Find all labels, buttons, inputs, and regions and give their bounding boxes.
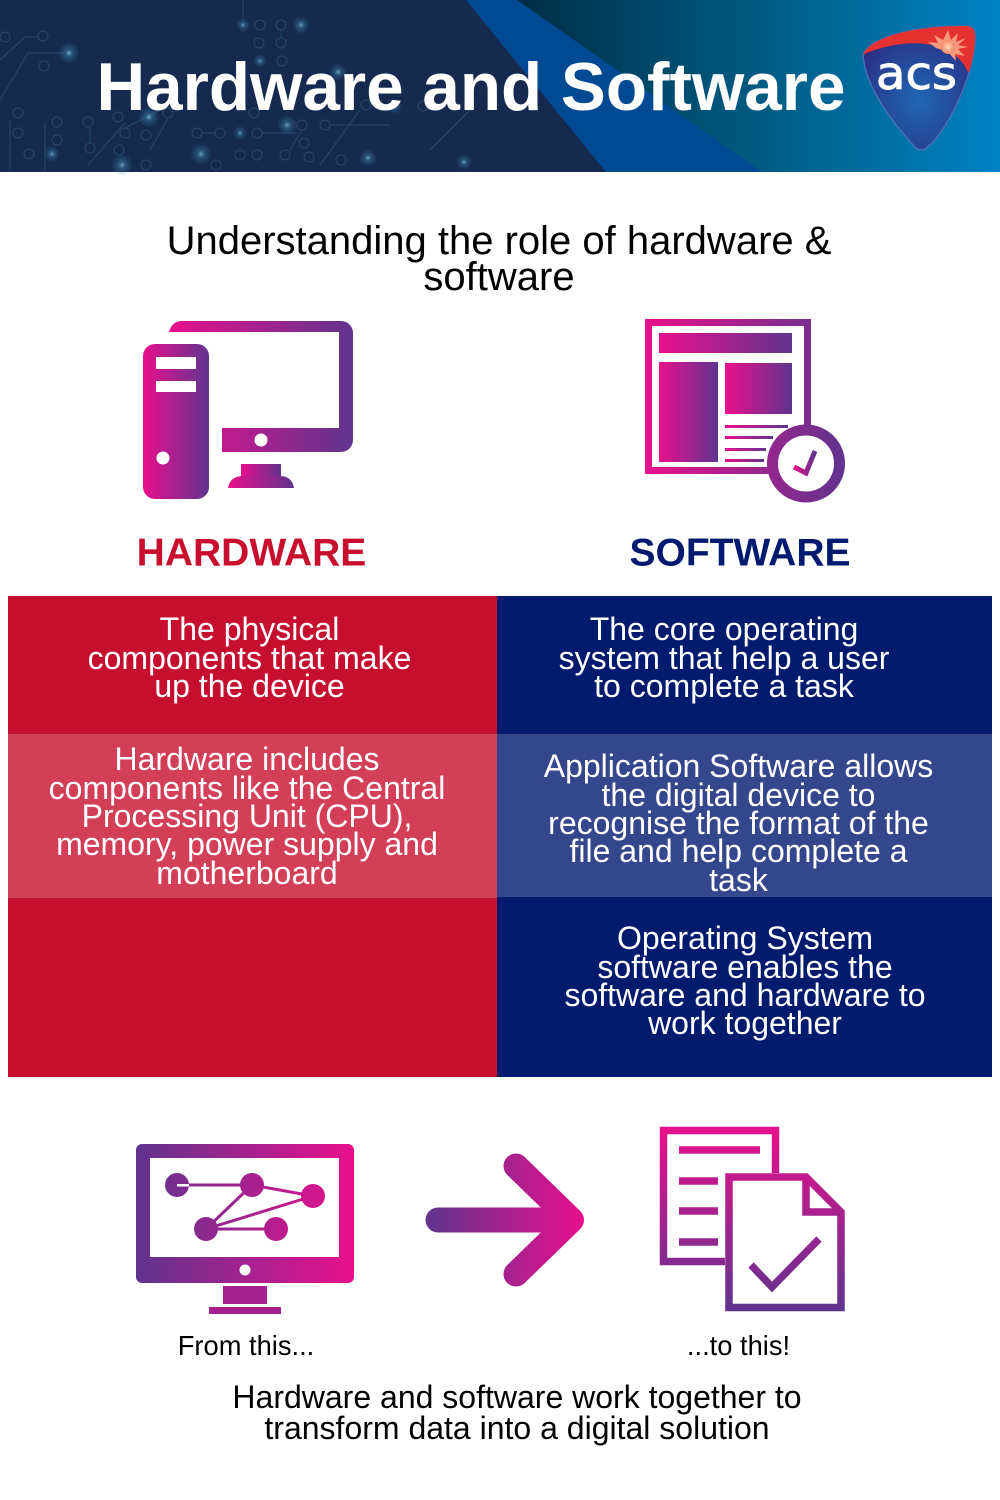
- software row one: [497, 596, 992, 734]
- circuit pattern: [0, 0, 470, 170]
- text line four: [725, 459, 764, 462]
- software row three: software and hardware to: [564, 977, 926, 1013]
- check mark: [794, 451, 815, 473]
- network links: [177, 1185, 313, 1229]
- page fold: [806, 1177, 841, 1212]
- panel: software column: [497, 596, 992, 1077]
- window frame: [648, 322, 808, 470]
- hardware row two: memory, power supply and: [56, 826, 438, 862]
- banner teal section: [517, 0, 1000, 172]
- hardware row one: [8, 596, 497, 734]
- subtitle: [167, 219, 832, 299]
- title: Hardware and Software: [96, 50, 846, 125]
- heading: hardware: HARDWARE: [137, 532, 366, 574]
- ACS logo: [860, 20, 980, 150]
- monitor neck: [241, 464, 281, 477]
- heading: software: SOFTWARE: [630, 532, 850, 574]
- back document: [664, 1130, 776, 1262]
- software row one: The core operating: [590, 611, 858, 647]
- monitor button: [240, 1264, 250, 1276]
- text line two: [725, 436, 773, 439]
- hardware row one: The physical: [160, 611, 339, 647]
- software row two: Application Software allows: [544, 748, 933, 784]
- clock circle: [772, 430, 840, 497]
- icon: documents with check: [664, 1130, 841, 1308]
- shield body: [863, 26, 975, 150]
- monitor: [169, 321, 353, 452]
- sunburst: [928, 30, 968, 61]
- closing statement: Hardware and software work together to: [232, 1379, 802, 1415]
- software row three: software enables the: [597, 949, 893, 985]
- monitor frame: [136, 1144, 354, 1283]
- header bar: [659, 333, 792, 353]
- arrow: [438, 1166, 572, 1274]
- front document: [729, 1177, 841, 1308]
- check mark: [751, 1239, 819, 1287]
- hardware row one: components that make: [88, 640, 411, 676]
- banner background: [0, 0, 1000, 172]
- hardware row two: Hardware includes: [114, 741, 380, 777]
- header banner: [0, 0, 1000, 176]
- hardware row one: up the device: [154, 668, 345, 704]
- subtitle: Understanding the role of hardware &: [167, 219, 832, 263]
- network nodes: [165, 1173, 325, 1241]
- left block: [659, 362, 718, 462]
- hardware row two: components like the Central: [49, 770, 445, 806]
- software row two: [497, 734, 992, 898]
- caption: to this: ...to this!: [687, 1330, 790, 1361]
- software row three: Operating System: [617, 920, 873, 956]
- glowing circuit nodes: [44, 16, 472, 176]
- tower: [143, 344, 209, 499]
- software row three: [497, 897, 992, 1077]
- caption: from this: From this...: [178, 1330, 314, 1361]
- node highlight: [177, 1184, 189, 1186]
- software row two: the digital device to: [602, 777, 875, 813]
- software row one: system that help a user: [559, 640, 890, 676]
- text line one: [725, 425, 788, 428]
- software row two: task: [709, 862, 769, 898]
- right block: [725, 363, 792, 414]
- document lines: [679, 1150, 760, 1242]
- monitor button: [254, 434, 268, 446]
- monitor base: [228, 476, 294, 488]
- hardware row three: [8, 898, 497, 1077]
- hardware row two: motherboard: [156, 855, 338, 891]
- logo lettering: acs: [876, 47, 957, 100]
- sun centre: [941, 40, 955, 54]
- hardware row two: Processing Unit (CPU),: [82, 798, 412, 834]
- subtitle: software: [423, 255, 575, 299]
- software row one: to complete a task: [594, 668, 855, 704]
- hardware row two: [8, 734, 497, 898]
- tower slot one: [156, 357, 196, 369]
- banner blue band: [466, 0, 1000, 172]
- icon: software window: [648, 322, 840, 497]
- tower slot two: [156, 381, 196, 392]
- text line three: [725, 448, 766, 451]
- software row two: recognise the format of the: [548, 805, 929, 841]
- closing statement: [232, 1379, 802, 1446]
- monitor stand: [223, 1286, 267, 1304]
- icon: monitor with data nodes: [136, 1144, 354, 1314]
- closing statement: transform data into a digital solution: [264, 1410, 770, 1446]
- panel: hardware column: [8, 596, 497, 1077]
- software row two: file and help complete a: [570, 833, 908, 869]
- software row three: work together: [647, 1005, 842, 1041]
- tower button: [156, 452, 170, 464]
- shield red top: [863, 26, 976, 72]
- icon: hardware computer: [143, 321, 353, 499]
- monitor base: [209, 1307, 281, 1314]
